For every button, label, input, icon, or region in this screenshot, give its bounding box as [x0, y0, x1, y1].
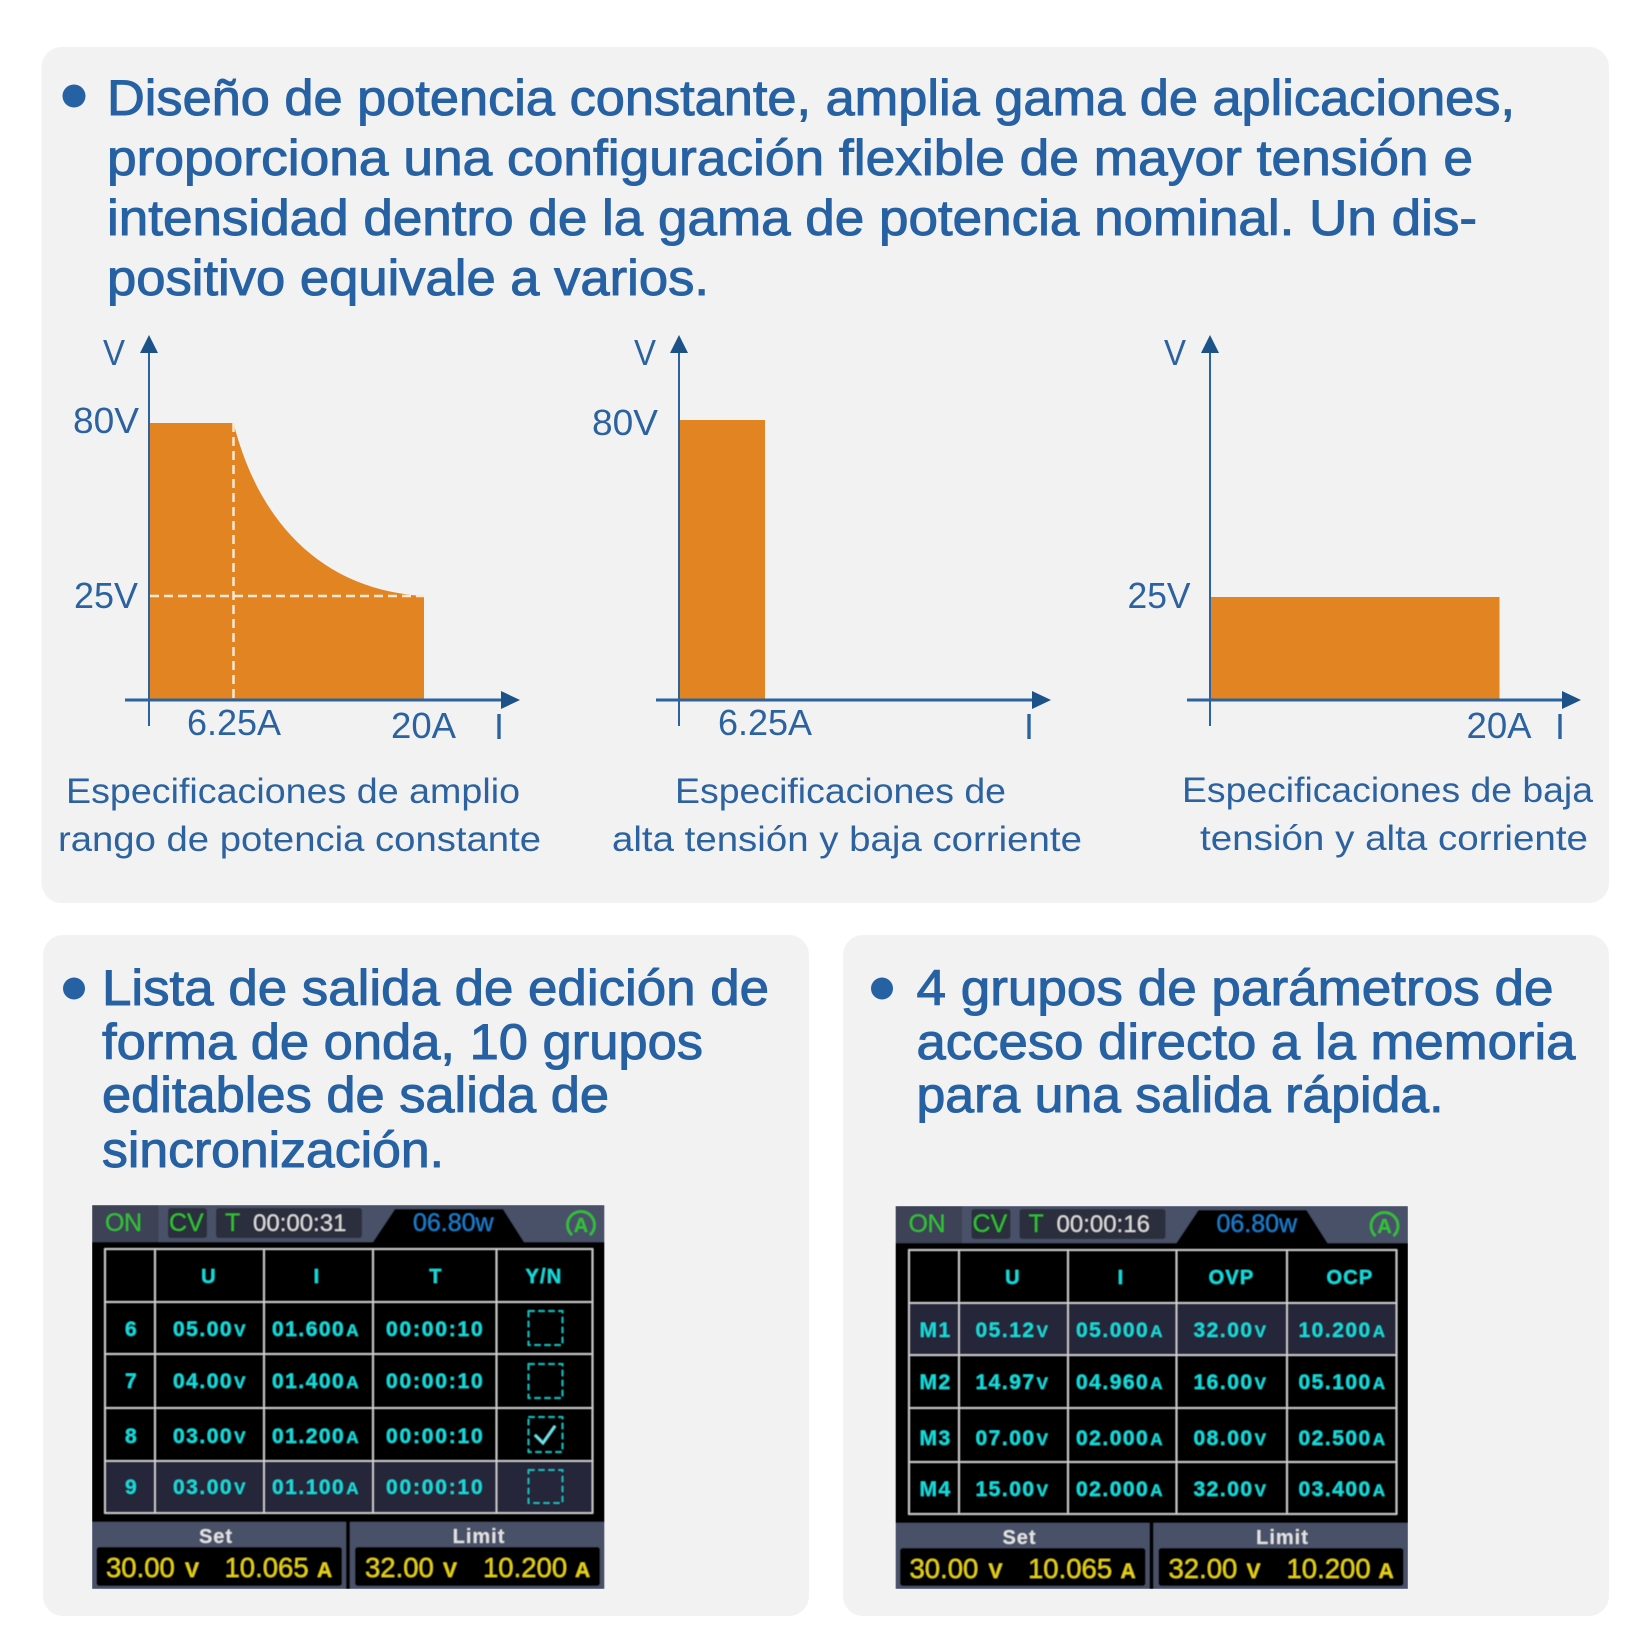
table header: OCP — [1327, 1267, 1373, 1289]
heading text — [916, 960, 1576, 1123]
axis labels: I — [1024, 706, 1034, 747]
set and limit footer: 10.200 — [483, 1552, 567, 1583]
caption: Especificaciones de — [675, 772, 1006, 811]
axes — [125, 335, 520, 726]
panel: constant power design — [42, 47, 1609, 903]
axis labels: 25V — [74, 575, 138, 616]
table header — [1005, 1267, 1373, 1289]
row 7 — [125, 1364, 562, 1398]
row M1: 05.000A — [1076, 1319, 1163, 1342]
row 8: 03.00V — [173, 1425, 246, 1448]
table header: I — [1118, 1267, 1124, 1289]
chart: high voltage low current — [592, 332, 1082, 859]
set and limit footer: V — [443, 1559, 457, 1582]
row M1: 05.12V — [976, 1319, 1049, 1342]
row 7: 01.400A — [272, 1370, 359, 1393]
row M2: 04.960A — [1076, 1371, 1163, 1394]
status bar: T — [1028, 1210, 1044, 1238]
heading text — [107, 70, 1515, 306]
axis labels: V — [1164, 332, 1186, 373]
axes — [1187, 335, 1581, 726]
axis labels: 6.25A — [187, 702, 281, 743]
status bar — [896, 1206, 1408, 1243]
status bar: 00:00:31 — [253, 1210, 346, 1237]
set and limit footer: 30.00 — [106, 1552, 175, 1583]
caption: tensión y alta corriente — [1200, 819, 1588, 858]
dashed guides — [150, 423, 424, 700]
row 7: 04.00V — [173, 1370, 246, 1393]
row M1: M1 — [920, 1319, 952, 1342]
caption: rango de potencia constante — [58, 820, 541, 859]
row M3: 02.000A — [1076, 1427, 1163, 1450]
table header: OVP — [1209, 1267, 1254, 1289]
row M4: 15.00V — [976, 1478, 1049, 1501]
axes — [656, 335, 1051, 726]
status bar: 00:00:16 — [1056, 1211, 1150, 1238]
status bar: ON — [908, 1210, 945, 1238]
device screen: memory table — [896, 1206, 1408, 1589]
row 6 — [125, 1311, 562, 1345]
axis labels: 80V — [592, 402, 658, 443]
row 8: 8 — [125, 1425, 138, 1448]
panel: memory parameter groups — [843, 935, 1609, 1616]
table header: U — [201, 1266, 217, 1288]
table header: Y/N — [526, 1266, 562, 1288]
caption — [58, 772, 541, 859]
table header: T — [429, 1266, 443, 1288]
row M3: 08.00V — [1194, 1427, 1267, 1450]
axis labels — [73, 332, 504, 747]
panel: waveform list output — [43, 935, 809, 1616]
table header: I — [314, 1266, 320, 1288]
chart: low voltage high current — [1128, 332, 1594, 858]
status bar: CV — [972, 1210, 1008, 1238]
table grid — [908, 1250, 1396, 1514]
set and limit footer: Set — [199, 1526, 233, 1548]
panel background — [843, 935, 1609, 1616]
orange rectangle — [1210, 597, 1500, 700]
device screen: list table — [92, 1205, 604, 1589]
set and limit footer: 10.065 — [224, 1552, 309, 1583]
row 7: 00:00:10 — [386, 1370, 484, 1393]
row M1: 32.00V — [1194, 1319, 1267, 1342]
set and limit footer: A — [1120, 1560, 1136, 1583]
heading text: Diseño de potencia constante, amplia gama de aplicaciones, — [107, 70, 1515, 126]
status bar: 06.80w — [1216, 1210, 1298, 1238]
row M3: 02.500A — [1298, 1427, 1385, 1450]
table header: U — [1005, 1267, 1021, 1289]
heading text: intensidad dentro de la gama de potencia nominal. Un dis- — [107, 190, 1477, 246]
set and limit footer: V — [988, 1560, 1003, 1583]
set and limit footer: A — [575, 1559, 590, 1582]
row M4: 02.000A — [1076, 1478, 1163, 1501]
set and limit footer: 30.00 — [910, 1553, 978, 1584]
axis labels: 80V — [73, 400, 139, 441]
row M3 — [920, 1427, 1385, 1450]
status bar: ON — [105, 1209, 142, 1237]
status bar: A — [574, 1215, 588, 1237]
heading text: sincronización. — [102, 1122, 444, 1178]
row M4: M4 — [920, 1478, 952, 1501]
row 9 — [125, 1470, 562, 1503]
axis labels: 20A — [1466, 705, 1532, 746]
set and limit footer: 32.00 — [1168, 1553, 1237, 1584]
status bar: A — [1377, 1216, 1392, 1238]
set and limit footer: Limit — [1256, 1527, 1309, 1549]
orange power area — [149, 423, 424, 700]
row M1 — [920, 1319, 1385, 1342]
set and limit footer: 10.065 — [1028, 1553, 1112, 1584]
row 7: 7 — [125, 1370, 138, 1393]
row M2: 05.100A — [1298, 1371, 1385, 1394]
row 9: 00:00:10 — [386, 1476, 484, 1499]
row 6: 05.00V — [173, 1318, 246, 1341]
set and limit footer — [896, 1523, 1408, 1589]
row M4: 32.00V — [1194, 1478, 1267, 1501]
set and limit footer: V — [185, 1559, 199, 1582]
table grid — [105, 1249, 592, 1513]
row 6: 6 — [125, 1318, 138, 1341]
axis labels — [592, 332, 1034, 747]
row M2: 16.00V — [1194, 1371, 1267, 1394]
status bar — [92, 1205, 604, 1242]
heading text — [102, 960, 769, 1178]
bullet — [63, 978, 85, 1000]
screen background — [896, 1206, 1408, 1589]
set and limit footer: V — [1246, 1560, 1261, 1583]
status bar: 06.80w — [413, 1209, 495, 1237]
heading text: Lista de salida de edición de — [102, 960, 769, 1016]
heading text: 4 grupos de parámetros de — [916, 960, 1554, 1016]
row 8: 00:00:10 — [386, 1425, 484, 1448]
bullet — [62, 84, 86, 108]
set and limit footer: A — [317, 1559, 332, 1582]
row M2: 14.97V — [976, 1371, 1049, 1394]
axis labels — [1128, 332, 1565, 747]
highlighted row — [908, 1303, 1396, 1356]
status bar: CV — [169, 1209, 204, 1237]
screen background — [92, 1205, 604, 1589]
axis labels: 20A — [391, 705, 456, 746]
row 9: 01.100A — [272, 1476, 359, 1499]
row M3: 07.00V — [976, 1427, 1049, 1450]
caption: Especificaciones de amplio — [66, 772, 520, 811]
row M4 — [920, 1478, 1385, 1501]
row M1: 10.200A — [1298, 1319, 1385, 1342]
set and limit footer: A — [1378, 1560, 1394, 1583]
caption — [1182, 771, 1594, 858]
row 8: 01.200A — [272, 1425, 359, 1448]
axis labels: I — [1555, 706, 1565, 747]
set and limit footer: 32.00 — [365, 1552, 434, 1583]
axis labels: V — [103, 332, 125, 373]
axis labels: I — [494, 706, 504, 747]
row M4: 03.400A — [1298, 1478, 1385, 1501]
orange rectangle — [679, 420, 765, 700]
set and limit footer — [92, 1522, 604, 1589]
row M2: M2 — [920, 1371, 952, 1394]
row 6: 00:00:10 — [386, 1318, 484, 1341]
heading text: para una salida rápida. — [916, 1067, 1444, 1123]
heading text: positivo equivale a varios. — [107, 250, 709, 306]
table header — [201, 1266, 562, 1288]
row 9: 9 — [125, 1476, 138, 1499]
row 8 — [125, 1417, 562, 1452]
status bar: T — [225, 1209, 240, 1237]
set and limit footer: Set — [1002, 1527, 1037, 1549]
heading text: editables de salida de — [102, 1067, 609, 1123]
heading text: forma de onda, 10 grupos — [102, 1014, 703, 1070]
caption: Especificaciones de baja — [1182, 771, 1594, 810]
row 9: 03.00V — [173, 1476, 246, 1499]
panel background — [43, 935, 809, 1616]
axis labels: 25V — [1128, 575, 1190, 616]
panel background — [42, 47, 1609, 903]
caption — [612, 772, 1082, 859]
caption: alta tensión y baja corriente — [612, 820, 1082, 859]
row M2 — [920, 1371, 1385, 1394]
heading text: proporciona una configuración flexible de mayor tensión e — [107, 130, 1473, 186]
heading text: acceso directo a la memoria — [916, 1014, 1576, 1070]
chart: wide constant power range — [58, 332, 541, 859]
axis labels: 6.25A — [718, 702, 812, 743]
bullet — [871, 978, 893, 1000]
row M3: M3 — [920, 1427, 952, 1450]
set and limit footer: Limit — [453, 1526, 505, 1548]
row 6: 01.600A — [272, 1318, 359, 1341]
set and limit footer: 10.200 — [1286, 1553, 1371, 1584]
axis labels: V — [634, 332, 656, 373]
highlighted row — [105, 1461, 592, 1513]
